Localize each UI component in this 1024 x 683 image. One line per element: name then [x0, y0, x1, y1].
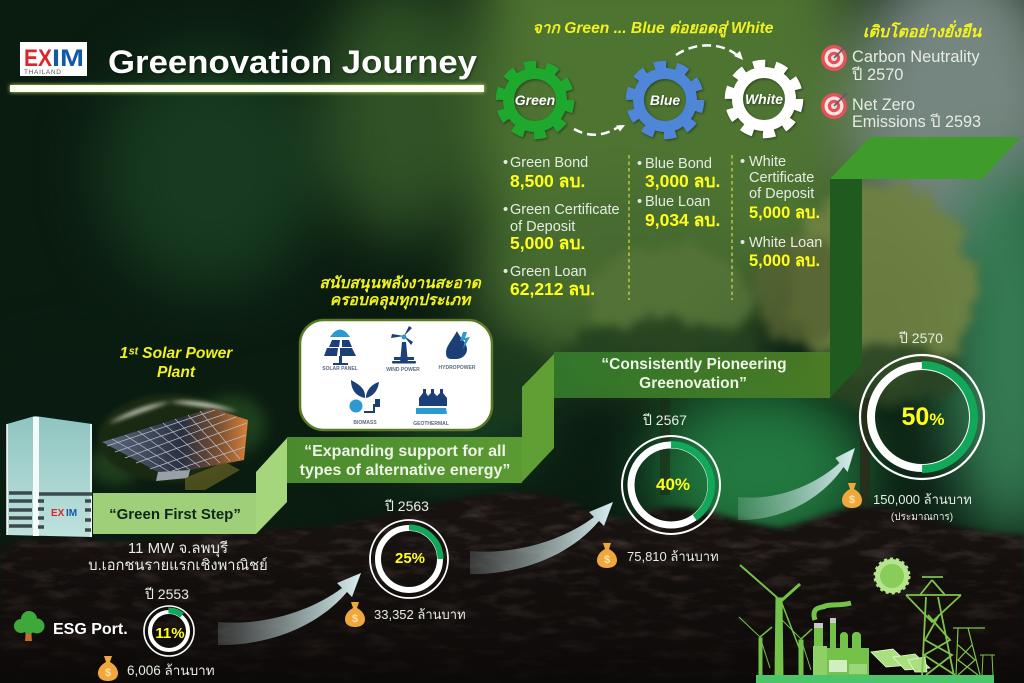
- solar panel array: [871, 649, 930, 672]
- icon: wind power: WIND POWER: [386, 367, 420, 373]
- metric: 2567: 75,810 ล้านบาท: [627, 549, 719, 564]
- list: green products: •: [503, 202, 508, 218]
- metric: 2563: ปี 2563: [385, 498, 429, 514]
- step 2 ribbon: expanding support: “Expanding support for all: [304, 443, 506, 460]
- goal: carbon neutrality: [821, 44, 980, 84]
- heading: sustainable growth: เติบโตอย่างยั่งยืน: [863, 20, 982, 41]
- step 1 ribbon: green first step: “Green First Step”: [109, 506, 241, 523]
- list: green products: 8,500 ลบ.: [510, 171, 585, 191]
- list: white products: •: [740, 154, 745, 170]
- list: blue products: [637, 156, 720, 230]
- list: blue products: •: [637, 194, 642, 210]
- metric: 2563: 25%: [395, 550, 425, 567]
- list: white products: White Loan: [749, 235, 822, 251]
- background trees: [453, 185, 975, 503]
- icon: solar panel: [322, 330, 358, 372]
- icon: building: EX: [51, 508, 65, 519]
- title: Greenovation Journey: [108, 44, 477, 80]
- logo: EXIM Thailand: EX: [24, 45, 52, 72]
- list: white products: of Deposit: [749, 186, 814, 202]
- metric: 2563: 33,352 ล้านบาท: [374, 607, 466, 622]
- metric: 2570: [842, 330, 984, 523]
- factory: [813, 603, 869, 676]
- goal: net zero: Emissions ปี 2593: [852, 113, 981, 131]
- goal: carbon neutrality: Carbon Neutrality: [852, 48, 980, 66]
- list: green products: Green Bond: [510, 155, 588, 171]
- list: green products: Green Certificate: [510, 202, 620, 218]
- list: green products: [503, 155, 620, 299]
- list: white products: 5,000 ลบ.: [749, 252, 820, 270]
- list: blue products: Blue Bond: [645, 156, 712, 172]
- heading: green blue white: จาก Green ... Blue ต่อยอดสู่ White: [533, 20, 774, 38]
- logo: EXIM Thailand: THAILAND: [24, 69, 61, 76]
- panel: energy types card: [300, 320, 492, 430]
- metric: 2570: 150,000 ล้านบาท: [873, 492, 972, 507]
- label: ESG Port: ESG Port.: [53, 621, 128, 638]
- step 1 ribbon: green first step: [93, 493, 256, 534]
- heading: clean energy support: [319, 275, 482, 310]
- arrow: blue to white: [676, 45, 743, 60]
- heading: first solar plant: 1ˢᵗ Solar Power: [120, 345, 233, 362]
- list: green products: of Deposit: [510, 219, 575, 235]
- illustration: green energy scene: [739, 559, 995, 683]
- step 3 ribbon: consistently pioneering: “Consistently Pioneering: [601, 356, 787, 373]
- gear: white: [729, 64, 799, 134]
- soil ground: [0, 492, 1024, 683]
- list: blue products: Blue Loan: [645, 194, 710, 210]
- goal: net zero: Net Zero: [852, 96, 915, 114]
- list: white products: Certificate: [749, 170, 814, 186]
- step 3 ribbon: consistently pioneering: [522, 352, 830, 482]
- arrow: green to blue: [574, 125, 625, 135]
- text: 11 MW description: 11 MW จ.ลพบุรี: [128, 540, 228, 558]
- goal: net zero: [821, 92, 981, 131]
- arrow: 2553 to 2563: [218, 573, 361, 645]
- icon: biomass: BIOMASS: [353, 420, 377, 426]
- list: white products: [740, 154, 822, 270]
- pylons: [906, 577, 995, 676]
- icon: solar panel: SOLAR PANEL: [322, 366, 358, 372]
- title header: [10, 42, 484, 92]
- list: blue products: 9,034 ลบ.: [645, 210, 720, 230]
- metric: 2567: ปี 2567: [643, 412, 687, 428]
- heading: first solar plant: Plant: [157, 364, 196, 381]
- icon: wind power: [386, 326, 420, 373]
- goal: carbon neutrality: ปี 2570: [851, 66, 903, 84]
- list: white products: 5,000 ลบ.: [749, 204, 820, 222]
- gear: green: [500, 65, 570, 135]
- heading: first solar plant: [120, 345, 233, 381]
- photo: solar panels: [90, 394, 266, 490]
- metric: 2553: [98, 586, 215, 681]
- gear: green: Green: [515, 92, 555, 108]
- gear: white: White: [745, 91, 783, 107]
- metric: 2570: ปี 2570: [899, 330, 943, 346]
- gear: blue: Blue: [650, 92, 680, 108]
- wind turbines: [739, 565, 812, 678]
- list: blue products: •: [637, 156, 642, 172]
- step 4 ribbon top: [830, 137, 1021, 398]
- list: white products: •: [740, 235, 745, 251]
- list: green products: •: [503, 264, 508, 280]
- grass strip: [756, 675, 994, 683]
- list: green products: 62,212 ลบ.: [510, 279, 595, 299]
- metric: 2570: (ประมาณการ): [891, 512, 953, 523]
- metric: 2553: 11%: [155, 625, 185, 642]
- icon: biomass: [350, 380, 380, 426]
- list: white products: White: [749, 154, 786, 170]
- icon: building: IM: [66, 508, 77, 519]
- icon: geothermal: [413, 389, 449, 427]
- text: 11 MW description: [88, 540, 268, 574]
- icon: tree: [14, 611, 44, 641]
- metric: 2553: 6,006 ล้านบาท: [127, 663, 215, 678]
- gear: blue: [630, 65, 700, 135]
- metric: 2553: ปี 2553: [145, 586, 189, 602]
- step 3 ribbon: consistently pioneering: Greenovation”: [639, 375, 747, 392]
- metric: 2570: 50%: [902, 403, 944, 431]
- icon: building: [7, 416, 92, 537]
- arrow: 2563 to 2567: [470, 502, 613, 574]
- step 2 ribbon: expanding support: types of alternative energy”: [300, 462, 510, 479]
- heading: clean energy support: ครอบคลุมทุกประเภท: [330, 292, 472, 310]
- step 2 ribbon: expanding support: [256, 437, 522, 534]
- heading: clean energy support: สนับสนุนพลังงานสะอาด: [319, 275, 482, 293]
- metric: 2567: 40%: [656, 475, 690, 494]
- metric: 2563: [345, 498, 466, 627]
- list: blue products: 3,000 ลบ.: [645, 171, 720, 191]
- icon: hydropower: HYDROPOWER: [439, 365, 476, 371]
- list: green products: 5,000 ลบ.: [510, 233, 585, 253]
- logo: EXIM Thailand: IM: [52, 45, 84, 72]
- sun: [875, 559, 909, 593]
- metric: 2567: [597, 412, 720, 568]
- logo: EXIM Thailand: [20, 42, 87, 76]
- arrow: 2567 to 2570: [738, 448, 855, 520]
- list: green products: •: [503, 155, 508, 171]
- icon: hydropower: [439, 331, 476, 371]
- icon: geothermal: GEOTHERMAL: [413, 421, 449, 427]
- title underline: [10, 85, 484, 92]
- text: 11 MW description: บ.เอกชนรายแรกเชิงพาณิชย์: [88, 557, 268, 574]
- list: green products: Green Loan: [510, 264, 587, 280]
